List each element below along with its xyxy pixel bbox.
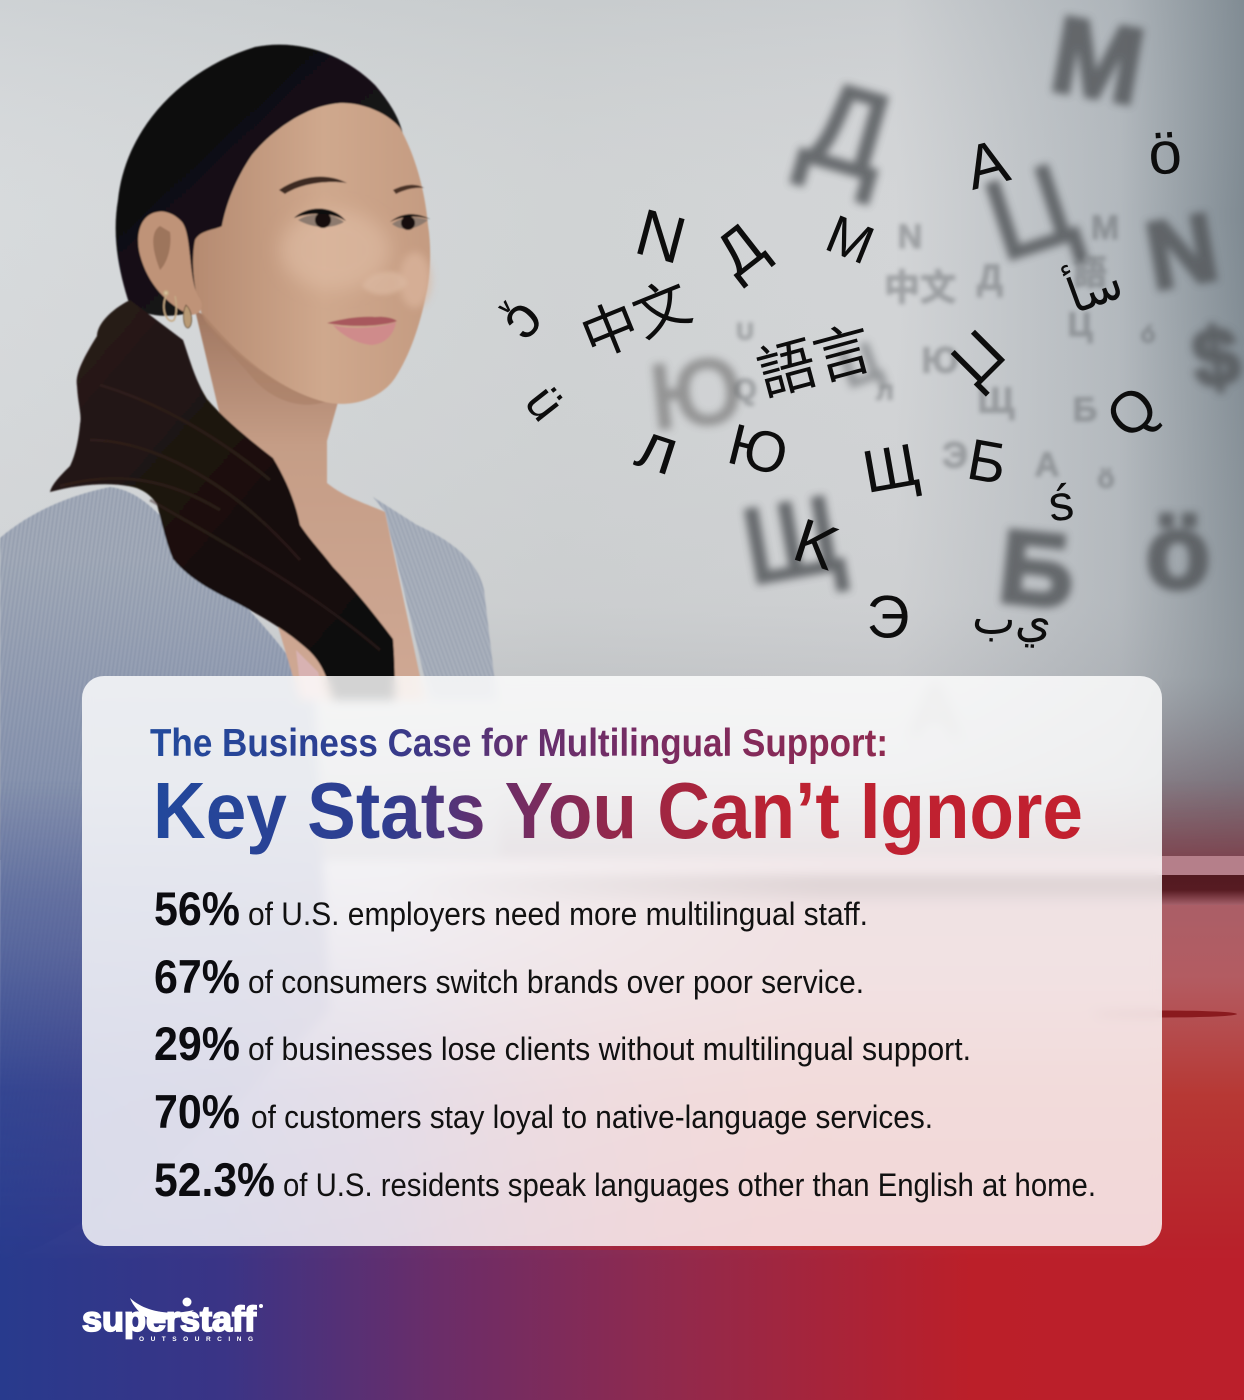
blurred background letters: U: [736, 318, 754, 346]
blurred background letters: ö: [1146, 493, 1210, 611]
blurred background letters: A: [1035, 446, 1059, 484]
blurred background letters: Q: [733, 374, 757, 406]
stat: 56%: 56%: [154, 882, 240, 935]
blurred background letters: 中文: [884, 259, 956, 311]
stat: 70%: [154, 1085, 933, 1138]
title: Key Stats You Can’t Ignore: [153, 766, 1083, 855]
letter o umlaut: ö: [1146, 118, 1184, 188]
blurred background letters: Б: [1073, 391, 1097, 429]
letter E: Э: [866, 584, 910, 650]
blurred background letters: N: [1139, 193, 1225, 311]
stat: 52.3%: [154, 1153, 1096, 1206]
blurred background letters: Э: [942, 434, 968, 476]
stat: 52.3%: 52.3%: [154, 1153, 275, 1206]
blurred background letters: ó: [1141, 322, 1155, 348]
ear: [138, 211, 202, 315]
letter N: N: [628, 194, 694, 278]
neck and chest: [195, 310, 425, 700]
bottom colour wash and red table: [0, 810, 1244, 1400]
Chinese word 2: 語言: [751, 316, 879, 408]
blurred background letters: Ю: [646, 340, 746, 448]
stat: 52.3%: of U.S. residents speak languages other than English at home.: [283, 1167, 1096, 1203]
logo wordmark: superstaff: [82, 1300, 256, 1339]
blurred background letters: $: [1187, 310, 1244, 406]
floating language letters: [493, 118, 1184, 650]
blurred background letters: N: [898, 218, 922, 256]
registered mark: [259, 1304, 263, 1308]
blurred background letters: Б: [994, 508, 1080, 632]
Arabic word: سأ: [1057, 248, 1130, 324]
letter u umlaut: ü: [514, 375, 576, 431]
blurred background letters: Ц: [971, 140, 1089, 284]
stat: 67%: 67%: [154, 950, 240, 1003]
face: [193, 103, 430, 404]
earrings: [164, 291, 192, 328]
blurred background letters: M: [1091, 209, 1119, 247]
brows: [279, 177, 347, 194]
blurred background letters: Щ: [734, 473, 852, 607]
letter s acute: ś: [1046, 474, 1076, 532]
sweater: [0, 487, 497, 1260]
letter Shcha: Щ: [857, 430, 925, 506]
stat: 29%: 29%: [154, 1017, 240, 1070]
subtitle: The Business Case for Multilingual Support:: [150, 722, 888, 765]
letter M: M: [818, 204, 882, 276]
stat: 70%: of customers stay loyal to native-language services.: [251, 1099, 933, 1135]
stat: 70%: 70%: [154, 1085, 240, 1138]
blurred background letters: л: [876, 374, 894, 406]
stat: 29%: of businesses lose clients without multilingual support.: [248, 1031, 971, 1067]
logo tagline: OUTSOURCING: [139, 1336, 253, 1343]
blurred background letters: ö: [1097, 462, 1115, 494]
blurred background letters: Ц: [1068, 306, 1093, 344]
stat: 29%: [154, 1017, 971, 1070]
blurred background letters: [646, 0, 1244, 749]
eyes: [294, 209, 430, 230]
blurred background letters: 語: [1073, 246, 1107, 294]
blurred background letters: Д: [977, 256, 1003, 298]
translucent stats panel: [82, 676, 1162, 1246]
stat: 56%: of U.S. employers need more multilingual staff.: [248, 896, 868, 932]
letter Yu: Ю: [722, 411, 794, 489]
letter K: K: [786, 506, 846, 584]
blurred background letters: A: [912, 671, 959, 749]
blurred background letters: Ю: [921, 340, 959, 380]
letter Tse: Ц: [937, 317, 1019, 399]
blurred background letters: Ц: [833, 332, 887, 398]
Arabic ya be: ي‌ب: [971, 590, 1053, 649]
letter Be: Б: [963, 427, 1011, 497]
letter Q: Q: [1094, 373, 1170, 451]
letter De: Д: [702, 210, 778, 290]
blurred background letters: Щ: [978, 380, 1015, 420]
smile: [327, 317, 397, 326]
logo swoosh: [130, 1298, 194, 1320]
blurred background letters: Д: [790, 54, 906, 206]
stat: 56%: [154, 882, 868, 935]
Chinese word: 中文: [572, 270, 700, 370]
ponytail: [50, 300, 395, 700]
nose: [362, 272, 407, 295]
stat: 67%: [154, 950, 864, 1003]
stat: 67%: of consumers switch brands over poor service.: [248, 964, 864, 1000]
letter El: л: [628, 407, 688, 489]
letter A: A: [958, 126, 1017, 204]
letter c caron: c: [493, 290, 561, 358]
hair: [116, 45, 403, 316]
letter c caron: v: [493, 295, 517, 319]
